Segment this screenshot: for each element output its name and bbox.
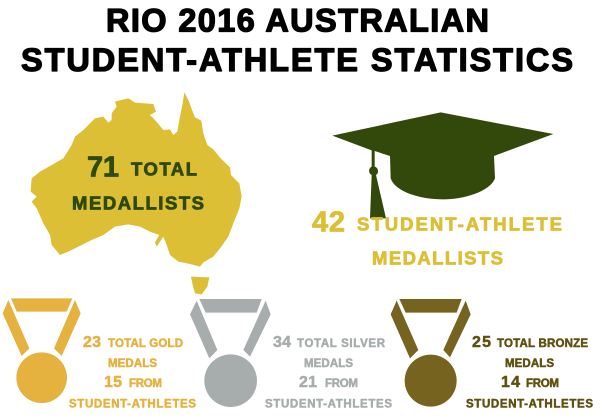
label: 71 total medallists: TOTAL — [131, 158, 197, 180]
title — [21, 2, 573, 78]
label: gold medal statistics — [69, 334, 196, 410]
icon: silver medal — [190, 299, 271, 407]
title: RIO 2016 AUSTRALIAN — [106, 2, 489, 38]
label: bronze medal statistics: MEDALS — [505, 358, 554, 370]
icon: gold medal — [3, 298, 81, 403]
icon: bronze medal — [391, 299, 471, 407]
label: silver medal statistics: TOTAL SILVER — [297, 338, 386, 350]
label: silver medal statistics: 34 — [273, 334, 291, 351]
label: gold medal statistics: TOTAL GOLD — [108, 338, 183, 350]
label: 71 total medallists: 71 — [87, 152, 119, 184]
panel: silver medals — [190, 299, 392, 410]
label: bronze medal statistics: STUDENT-ATHLETES — [466, 398, 593, 410]
label: silver medal statistics: MEDALS — [304, 358, 353, 370]
label: 42 student-athlete medallists: 42 — [312, 206, 345, 238]
label: 42 student-athlete medallists — [312, 206, 562, 268]
label: bronze medal statistics: TOTAL BRONZE — [497, 338, 588, 350]
label: 42 student-athlete medallists: MEDALLISTS — [372, 248, 503, 268]
label: bronze medal statistics: 14 — [501, 374, 520, 391]
label: 71 total medallists — [72, 152, 204, 214]
label: silver medal statistics: 21 — [299, 374, 317, 391]
label: bronze medal statistics — [466, 334, 593, 410]
panel: bronze medals — [391, 299, 593, 410]
panel: total medallists — [31, 92, 242, 294]
label: 71 total medallists: MEDALLISTS — [72, 192, 204, 214]
panel: gold medals — [3, 298, 196, 410]
label: silver medal statistics: FROM — [325, 378, 358, 390]
label: bronze medal statistics: FROM — [526, 378, 559, 390]
icon: graduation cap — [332, 112, 553, 218]
icon: map of Australia — [31, 92, 242, 294]
label: silver medal statistics: STUDENT-ATHLETES — [265, 398, 392, 410]
label: gold medal statistics: FROM — [129, 378, 162, 390]
panel: student-athlete medallists — [312, 112, 562, 269]
label: bronze medal statistics: 25 — [472, 334, 491, 351]
label: silver medal statistics — [265, 334, 392, 410]
label: 42 student-athlete medallists: STUDENT-ATHLETE — [357, 214, 562, 234]
title: STUDENT-ATHLETE STATISTICS — [21, 42, 573, 78]
label: gold medal statistics: MEDALS — [108, 358, 157, 370]
label: gold medal statistics: 23 — [83, 334, 101, 351]
label: gold medal statistics: 15 — [104, 374, 122, 391]
label: gold medal statistics: STUDENT-ATHLETES — [69, 398, 196, 410]
